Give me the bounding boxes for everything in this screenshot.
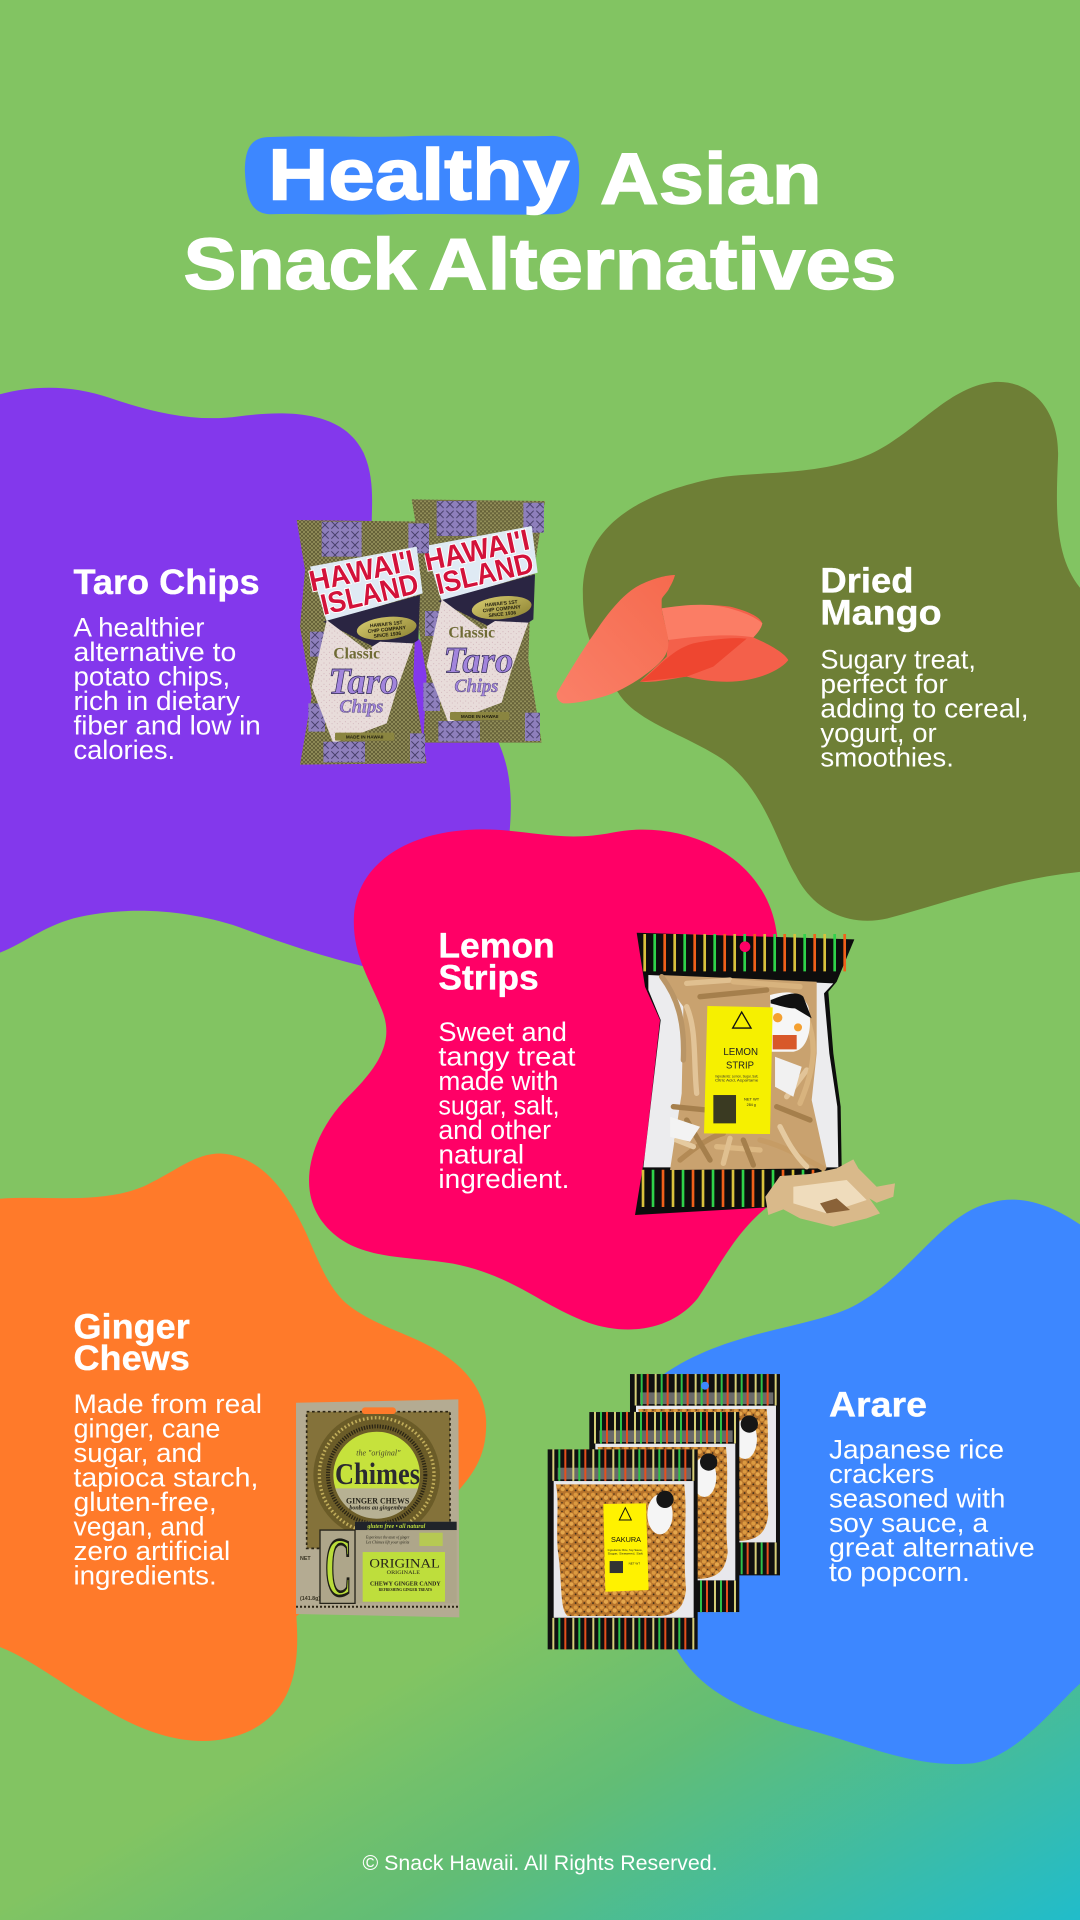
description: Taro Chips: alternative to xyxy=(73,637,236,667)
description: Lemon Strips: and other xyxy=(438,1115,551,1145)
image: Chimes ginger chews bag: the "original" xyxy=(356,1449,401,1458)
heading: Ginger Chews xyxy=(73,1307,190,1378)
description: Dried Mango: smoothies. xyxy=(820,743,954,773)
description: Ginger Chews: Made from real xyxy=(73,1389,262,1419)
olive blob xyxy=(583,382,1080,921)
back bag: Chips xyxy=(454,676,498,697)
heading: Arare: Arare xyxy=(829,1386,927,1425)
front bag xyxy=(297,520,430,765)
description: Dried Mango: Sugary treat, xyxy=(820,645,976,675)
image: taro chip bags xyxy=(297,499,545,765)
panel: dried mango xyxy=(557,382,1080,921)
image: lemon strip bag: NET WT xyxy=(744,1097,760,1102)
heading: Taro Chips: Taro Chips xyxy=(73,563,260,602)
image: lemon strip bag: Citric Acid, Aspartame xyxy=(715,1079,759,1083)
description: Taro Chips: calories. xyxy=(73,735,175,765)
description: Arare: soy sauce, a xyxy=(829,1508,988,1538)
panel: arare xyxy=(548,1200,1080,1764)
image: Chimes ginger chews bag xyxy=(296,1399,459,1617)
back bag: HAWAI'I xyxy=(421,523,532,578)
description: Lemon Strips: sugar, salt, xyxy=(438,1090,560,1120)
front bag: Classic xyxy=(333,645,380,662)
heading: Dried Mango: Dried xyxy=(820,562,913,601)
description: Taro Chips xyxy=(73,613,261,765)
image: lemon strip bag: STRIP xyxy=(726,1060,754,1071)
back bag: CHIP COMPANY xyxy=(482,604,522,614)
front bag: SAKURA xyxy=(611,1535,641,1544)
title line 2: Alternatives xyxy=(429,225,896,305)
heading: Ginger Chews: Ginger xyxy=(73,1307,190,1346)
image: Chimes ginger chews bag: ORIGINAL xyxy=(369,1556,440,1570)
image: lemon strip bag xyxy=(635,933,895,1227)
back bag: HAWAII'S 1ST xyxy=(485,599,518,609)
description: Lemon Strips: natural xyxy=(438,1139,524,1169)
heading: Lemon Strips: Lemon xyxy=(438,927,555,966)
image: dried mango slices xyxy=(557,575,788,703)
image: Chimes ginger chews bag: Experience the taste of ginger xyxy=(365,1534,410,1539)
heading: Dried Mango: Mango xyxy=(820,593,942,632)
image: Chimes ginger chews bag: NET xyxy=(300,1556,311,1562)
title xyxy=(184,136,896,305)
description: Dried Mango: adding to cereal, xyxy=(820,694,1029,724)
description: Ginger Chews: ingredients. xyxy=(73,1560,217,1590)
description: Ginger Chews: sugar, and xyxy=(73,1438,202,1468)
image: Chimes ginger chews bag: gluten free • all natural xyxy=(366,1524,426,1530)
description: Lemon Strips: made with xyxy=(438,1066,558,1096)
description: Ginger Chews xyxy=(73,1389,262,1590)
description: Lemon Strips xyxy=(438,1017,576,1194)
title highlight: blue brush xyxy=(245,136,579,215)
purple blob xyxy=(0,388,511,967)
back bag: ISLAND xyxy=(432,547,537,601)
description: Arare xyxy=(829,1434,1035,1587)
image: Chimes ginger chews bag: ORIGINALE xyxy=(387,1570,420,1576)
description: Taro Chips: rich in dietary xyxy=(73,686,241,716)
middle bag xyxy=(589,1412,739,1612)
image: Chimes ginger chews bag: GINGER CHEWS xyxy=(346,1496,410,1505)
description: Ginger Chews: gluten-free, xyxy=(73,1487,217,1517)
description: Arare: to popcorn. xyxy=(829,1557,970,1587)
description: Arare: great alternative xyxy=(829,1532,1035,1562)
back bag: SINCE 1936 xyxy=(488,610,517,619)
footer copyright: © Snack Hawaii. All Rights Reserved. xyxy=(362,1851,718,1875)
description: Dried Mango: perfect for xyxy=(820,669,948,699)
front bag: Chips xyxy=(339,697,383,718)
back bag: Classic xyxy=(448,625,495,642)
heading: Ginger Chews: Chews xyxy=(73,1339,190,1378)
front bag: NET WT xyxy=(629,1561,640,1565)
title line 2: Snack xyxy=(184,225,417,305)
pink blob xyxy=(309,829,840,1329)
heading: Lemon Strips: Strips xyxy=(438,958,539,997)
front bag xyxy=(548,1449,698,1649)
description: Dried Mango xyxy=(820,645,1029,773)
description: Lemon Strips: Sweet and xyxy=(438,1017,567,1047)
front bag: HAWAI'I xyxy=(306,544,417,599)
image: Chimes ginger chews bag: REFRESHING GINGER TREATS xyxy=(379,1587,433,1592)
description: Ginger Chews: vegan, and xyxy=(73,1512,204,1542)
back bag: Taro xyxy=(443,641,513,682)
image: Chimes ginger chews bag: (141.8g) xyxy=(300,1596,320,1602)
image: Chimes ginger chews bag: C xyxy=(325,1522,352,1614)
description: Ginger Chews: zero artificial xyxy=(73,1536,230,1566)
description: Ginger Chews: ginger, cane xyxy=(73,1414,220,1444)
front bag: MADE IN HAWAII xyxy=(346,735,383,740)
front bag: SINCE 1936 xyxy=(373,631,402,640)
front bag: ISLAND xyxy=(317,567,422,622)
title line 1: Healthy xyxy=(268,136,569,216)
description: Arare: Japanese rice xyxy=(829,1434,1004,1464)
front bag: Sugar, Seaweed, Salt xyxy=(608,1551,643,1555)
image: Chimes ginger chews bag: CHEWY GINGER CANDY xyxy=(370,1581,441,1587)
image: lemon strip bag: 284 g xyxy=(747,1103,756,1107)
image: Chimes ginger chews bag: Let Chimes lift your spirits xyxy=(365,1539,410,1544)
front bag: Ingredients: Rice, Soy Sauce, xyxy=(608,1548,643,1552)
image: arare rice cracker bags xyxy=(548,1374,780,1649)
panel: ginger chews xyxy=(0,1153,486,1741)
description: Lemon Strips: ingredient. xyxy=(438,1164,569,1194)
title line 1: Asian xyxy=(600,139,822,219)
blue blob xyxy=(661,1200,1080,1764)
panel: taro chips xyxy=(0,388,545,967)
front bag: CHIP COMPANY xyxy=(367,625,407,635)
description: Arare: seasoned with xyxy=(829,1483,1005,1513)
description: Arare: crackers xyxy=(829,1459,934,1489)
front bag: HAWAII'S 1ST xyxy=(370,620,403,629)
back bag xyxy=(412,499,545,743)
front bag: Taro xyxy=(328,661,398,702)
heading: Dried Mango xyxy=(820,562,942,632)
description: Ginger Chews: tapioca starch, xyxy=(73,1463,258,1493)
image: Chimes ginger chews bag: bonbons au gingembre xyxy=(349,1505,406,1511)
back bag xyxy=(630,1374,780,1575)
description: Taro Chips: A healthier xyxy=(73,613,205,643)
panel: lemon strips xyxy=(309,829,895,1329)
description: Taro Chips: potato chips, xyxy=(73,662,230,692)
orange blob xyxy=(0,1153,486,1741)
description: Taro Chips: fiber and low in xyxy=(73,711,261,741)
description: Lemon Strips: tangy treat xyxy=(438,1041,576,1071)
image: Chimes ginger chews bag: Chimes xyxy=(335,1457,420,1491)
description: Dried Mango: yogurt, or xyxy=(820,718,937,748)
image: lemon strip bag: LEMON xyxy=(723,1047,758,1058)
title line 2 xyxy=(184,225,896,305)
image: lemon strip bag: Ingredients: Lemon, Sugar, Salt, xyxy=(715,1075,758,1079)
back bag: MADE IN HAWAII xyxy=(461,714,498,719)
title line 1 xyxy=(268,136,822,219)
heading: Lemon Strips xyxy=(438,927,555,997)
